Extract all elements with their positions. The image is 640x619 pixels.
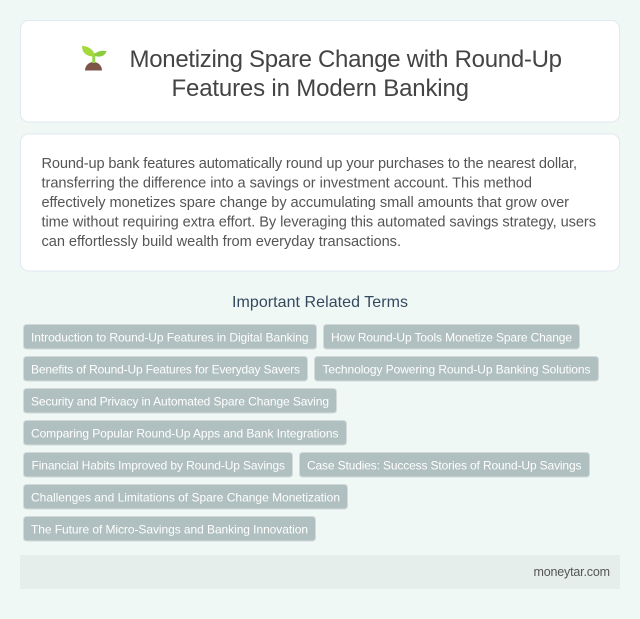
- text block: description: transferring the difference into a savings or investment account. This method: [42, 176, 532, 192]
- chip: challenges: [24, 484, 348, 509]
- chip: challenges: Challenges and Limitations of Spare Change Monetization: [31, 490, 340, 504]
- text block: description: can effortlessly build wealth from everyday transactions.: [42, 234, 401, 250]
- panel: related term chips: [24, 324, 598, 541]
- text block: description: effectively monetizes spare change by accumulating small amounts that grow over: [42, 195, 569, 211]
- panel: description card: [20, 134, 620, 271]
- chip: future: The Future of Micro-Savings and Banking Innovation: [31, 522, 308, 536]
- footer: [20, 555, 620, 589]
- chip: monetize: [324, 324, 580, 349]
- chip: benefits: [24, 356, 308, 381]
- icon: sprout: [82, 46, 106, 70]
- chip: technology: Technology Powering Round-Up Banking Solutions: [322, 362, 590, 376]
- text block: description: [42, 156, 596, 250]
- text block: description: time without requiring extra effort. By leveraging this automated savings strategy, users: [42, 214, 596, 230]
- title: Features in Modern Banking: [172, 75, 469, 102]
- chip: benefits: Benefits of Round-Up Features for Everyday Savers: [31, 362, 300, 376]
- chip: future: [24, 516, 316, 541]
- chip: comparing: [24, 420, 346, 445]
- chip: monetize: How Round-Up Tools Monetize Spare Change: [331, 330, 572, 344]
- chip: introduction: [24, 324, 316, 349]
- chip: security: [24, 388, 336, 413]
- chip: security: Security and Privacy in Automated Spare Change Saving: [31, 394, 329, 408]
- text block: description: Round-up bank features automatically round up your purchases to the nearest dollar,: [42, 156, 577, 172]
- chip: comparing: Comparing Popular Round-Up Apps and Bank Integrations: [31, 426, 338, 440]
- chip: habits: Financial Habits Improved by Round-Up Savings: [32, 458, 285, 472]
- title: [130, 46, 562, 102]
- chip: technology: [314, 356, 598, 381]
- chip: case studies: Case Studies: Success Stories of Round-Up Savings: [307, 458, 582, 472]
- panel: title card: [20, 20, 620, 122]
- chip: introduction: Introduction to Round-Up Features in Digital Banking: [31, 330, 308, 344]
- chip: case studies: [300, 452, 590, 477]
- footer: site name: moneytar.com: [534, 565, 610, 579]
- chip: habits: [24, 452, 292, 477]
- heading: related terms: Important Related Terms: [232, 294, 408, 311]
- title: Monetizing Spare Change with Round-Up: [130, 46, 562, 73]
